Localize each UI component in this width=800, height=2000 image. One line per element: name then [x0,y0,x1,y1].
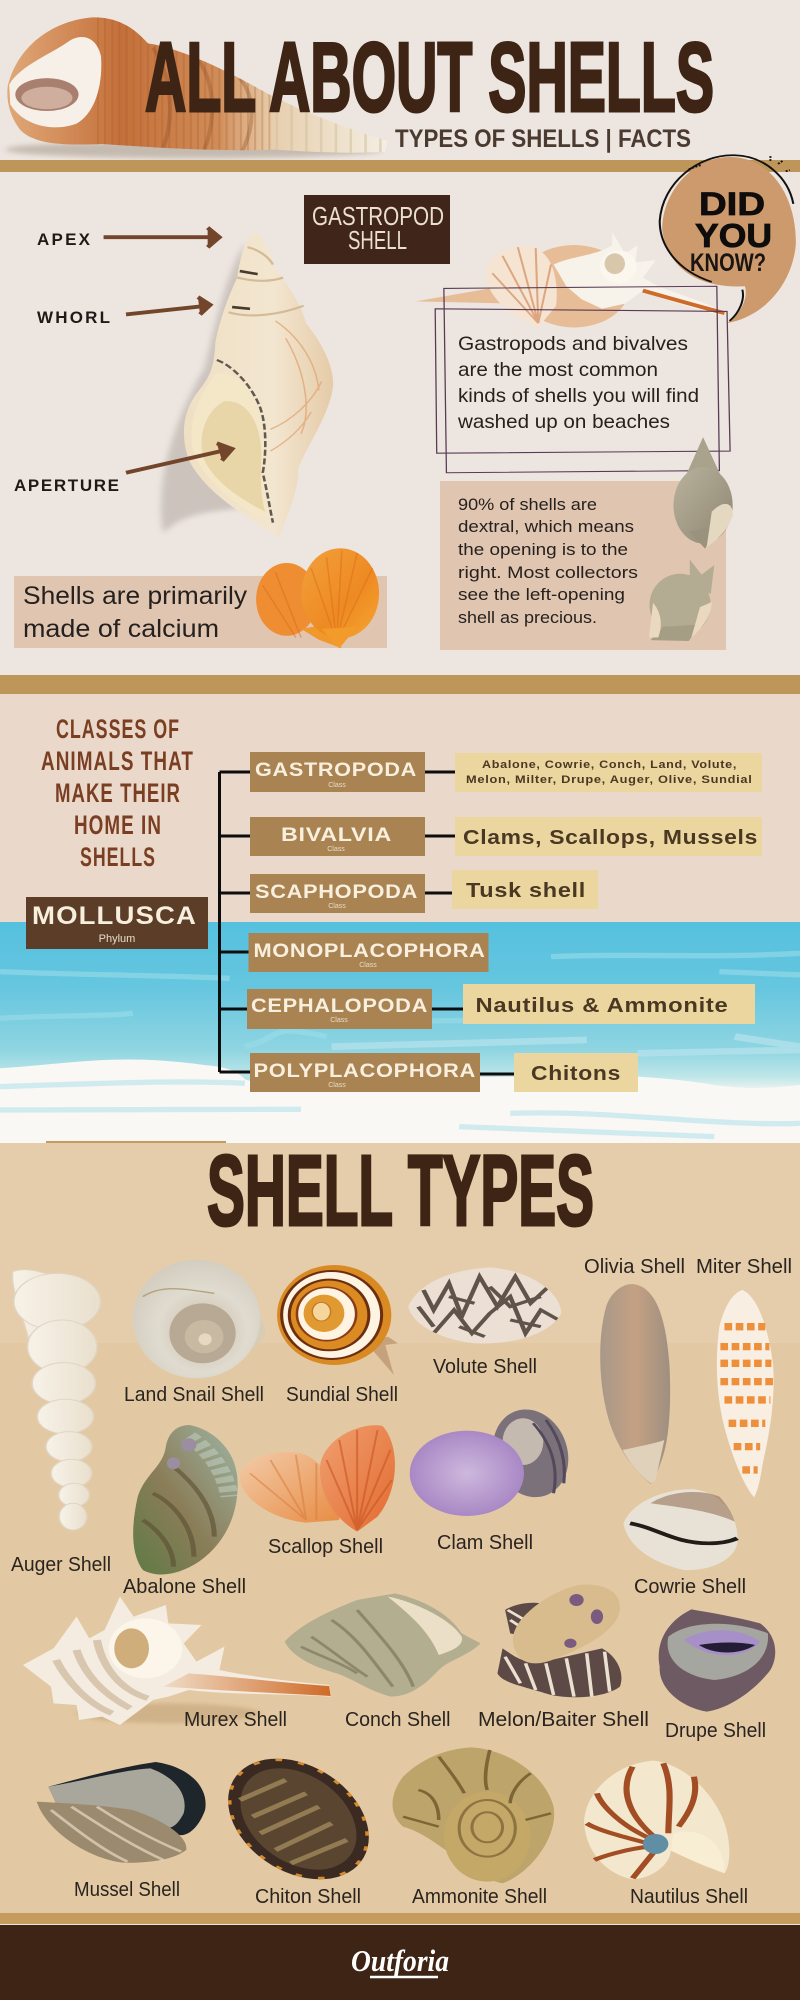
arrow: apex [104,228,219,247]
class: cephalopoda [247,989,432,1029]
panel: dextral shells fact: the opening is to the [458,540,628,559]
class: cephalopoda: CEPHALOPODA [251,996,428,1017]
divider band [0,1913,800,1924]
examples: polyplacophora [514,1053,638,1092]
labels: shell names: Olivia Shell [584,1256,685,1278]
labels: shell names: Volute Shell [433,1356,537,1378]
icon: nautilus shell [584,1761,729,1879]
icon: melon or baiter shell [497,1585,621,1697]
labels: shell names: Nautilus Shell [630,1886,748,1908]
arrow: aperture [126,443,232,473]
icon: abalone shell [133,1425,238,1574]
callout: calcium fact [14,576,387,648]
icon: land snail shell [133,1260,265,1378]
class: bivalvia: Class [327,846,345,853]
labels: shell names: Miter Shell [696,1256,792,1278]
icon: scallop shell [240,1425,395,1532]
icon: drupe shell [659,1609,775,1712]
icon: olivia shell [600,1284,670,1484]
panel: classes background [0,694,800,923]
tree connectors [220,772,514,1074]
examples: gastropoda [455,753,762,792]
labels: shell names: Scallop Shell [268,1536,383,1558]
labels: shell names: Auger Shell [11,1554,111,1576]
labels: shell names: Clam Shell [437,1532,533,1554]
class: scaphopoda [250,874,425,913]
class: scaphopoda: SCAPHOPODA [255,882,418,903]
icon: clam shell [410,1407,575,1516]
icon: murex shell [23,1597,331,1725]
heading: classes of animals: MAKE THEIR [55,778,181,808]
labels: shell names: Chiton Shell [255,1886,361,1908]
examples: gastropoda: Abalone, Cowrie, Conch, Land, Volute, [482,759,737,771]
labels: shell names [11,1256,792,1908]
panel: common shells fact [435,286,730,473]
label: whorl: WHORL [37,308,110,327]
class: polyplacophora: POLYPLACOPHORA [254,1061,476,1082]
label: apex: APEX [37,230,91,249]
class: gastropoda [250,752,425,792]
icon: large spiral shell behind title [5,17,388,158]
class: gastropoda: Class [328,782,346,789]
footer: Outforia [351,1943,449,1978]
panel: common shells fact: Gastropods and bivalves [458,333,688,355]
box: mollusca phylum [26,897,208,949]
examples: cephalopoda [463,984,755,1024]
labels: shell names: Mussel Shell [74,1879,180,1901]
class: monoplacophora: MONOPLACOPHORA [254,941,486,962]
class: cephalopoda: Class [330,1017,348,1024]
icon: gastropod shell [161,232,333,538]
labels: shell names: Land Snail Shell [124,1384,264,1406]
heading: classes of animals: CLASSES OF [56,714,180,744]
heading: classes of animals: HOME IN [74,810,162,840]
labels: shell names: Cowrie Shell [634,1576,746,1598]
panel: header and gastropod facts background [0,0,800,680]
panel: dextral shells fact: right. Most collectors [458,563,638,582]
icon: did you know speech bubble: DID [699,186,765,222]
label: aperture: APERTURE [14,476,119,495]
panel: dextral shells fact [440,481,726,650]
box: mollusca phylum: MOLLUSCA [32,902,197,930]
heading: classes of animals: ANIMALS THAT [41,746,194,776]
icon: auger shell [12,1270,101,1530]
icon: peach blob with scallop and murex [416,232,724,327]
examples: scaphopoda [452,870,598,909]
class: bivalvia: BIVALVIA [281,825,392,846]
class: gastropoda: GASTROPODA [255,760,417,781]
icon: did you know speech bubble [660,155,796,323]
icon: did you know speech bubble: KNOW? [690,249,766,277]
panel: dextral shells fact: dextral, which means [458,517,634,536]
icon: conch shell [285,1593,481,1697]
subtitle: TYPES OF SHELLS | FACTS [395,125,691,153]
heading box: gastropod shell: SHELL [348,225,407,255]
arrow: whorl [126,297,210,314]
panel: dextral shells fact: shell as precious. [458,608,597,627]
class: monoplacophora: Class [359,962,377,969]
heading: classes of animals [41,714,194,872]
icon: cowrie shell [623,1489,738,1570]
icon: volute shell [408,1267,561,1343]
panel: shell types background [0,1141,800,1913]
examples: gastropoda: Melon, Milter, Drupe, Auger, Olive, Sundial [466,774,752,786]
panel: common shells fact: are the most common [458,359,658,381]
icon: miter shell [717,1290,774,1497]
class: polyplacophora: Class [328,1082,346,1089]
icon: did you know speech bubble: YOU [695,217,772,254]
illustration: sea and beach [0,922,800,1143]
class: bivalvia [250,817,425,856]
class: scaphopoda: Class [328,903,346,910]
icon: chiton shell [201,1744,396,1894]
panel: common shells fact: kinds of shells you will find [458,385,699,407]
labels: shell names: Conch Shell [345,1709,450,1731]
icon: orange scallops [256,548,379,648]
panel: dextral shells fact: 90% of shells are [458,495,597,514]
labels: shell names: Abalone Shell [123,1576,246,1598]
heading box: gastropod shell: GASTROPOD [312,201,444,231]
icon: sundial shell [277,1265,398,1375]
labels: shell names: Ammonite Shell [412,1886,547,1908]
labels: shell names: Murex Shell [184,1709,287,1731]
divider band [0,160,800,172]
icon: mussel shell [37,1762,206,1863]
class: polyplacophora [250,1053,480,1092]
panel: dextral shells fact: see the left-opening [458,585,625,604]
icon: ammonite shell [393,1747,554,1883]
box: mollusca phylum: Phylum [99,933,135,945]
examples: bivalvia: Clams, Scallops, Mussels [463,827,758,849]
class: monoplacophora [248,933,488,972]
examples: polyplacophora: Chitons [531,1063,621,1085]
examples: scaphopoda: Tusk shell [466,880,586,902]
callout: calcium fact: made of calcium [23,615,219,643]
heading: classes of animals: SHELLS [80,842,156,872]
footer [0,1925,800,2000]
examples: cephalopoda: Nautilus & Ammonite [476,995,728,1017]
examples: bivalvia [455,817,762,856]
panel: common shells fact: washed up on beaches [457,411,670,433]
callout: calcium fact: Shells are primarily [23,582,248,610]
labels: shell names: Sundial Shell [286,1384,398,1406]
divider band [0,675,800,694]
labels: shell names: Melon/Baiter Shell [478,1709,649,1731]
heading box: gastropod shell [304,195,450,264]
icon: small gray shells [649,437,733,641]
labels: shell names: Drupe Shell [665,1720,766,1742]
